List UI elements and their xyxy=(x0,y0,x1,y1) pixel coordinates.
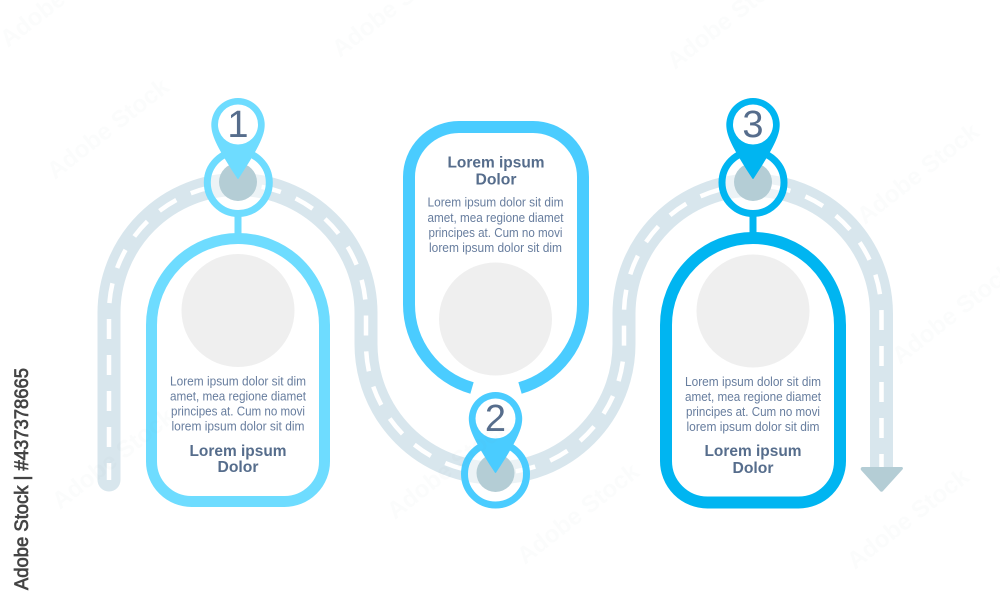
panel 1 body text: principes at. Cum no movi xyxy=(171,404,305,418)
panel 2 body text: amet, mea regione diamet xyxy=(428,210,564,225)
panel 1 heading xyxy=(190,443,286,476)
watermark: Adobe Stock xyxy=(512,458,645,570)
panel 2 xyxy=(409,127,583,388)
panel 2 body text: Lorem ipsum dolor sit dim xyxy=(428,195,564,210)
panel 3 body text: Lorem ipsum dolor sit dim xyxy=(685,374,821,389)
panel 3 heading xyxy=(704,443,802,477)
panel 3 body text xyxy=(685,374,821,434)
number 1: 1 xyxy=(227,104,249,146)
panel 3 body text: lorem ipsum dolor sit dim xyxy=(686,419,820,434)
watermark: Adobe Stock xyxy=(842,463,975,575)
panel 2 body text: principes at. Cum no movi xyxy=(428,225,563,240)
marker 1 xyxy=(207,98,269,235)
panel 2 body text: lorem ipsum dolor sit dim xyxy=(429,240,562,255)
panel 1 outline xyxy=(152,238,324,501)
panel 3 xyxy=(666,238,840,502)
number 3: 3 xyxy=(742,104,764,146)
panel 3 outline xyxy=(666,238,840,502)
panel 3 heading: Dolor xyxy=(732,460,774,477)
watermark: Adobe Stock xyxy=(42,73,175,185)
panel 2 body text xyxy=(428,195,564,255)
panel 2 image placeholder xyxy=(439,262,552,376)
marker 3 xyxy=(722,98,784,235)
panel 3 image placeholder xyxy=(696,254,810,368)
watermark: Adobe Stock xyxy=(382,413,515,525)
road with arrow xyxy=(109,184,903,492)
panel 3 body text: principes at. Cum no movi xyxy=(686,404,820,419)
panel 2 heading xyxy=(448,154,544,188)
panel 1 body text: lorem ipsum dolor sit dim xyxy=(172,418,304,434)
panel 3 heading: Lorem ipsum xyxy=(704,443,802,460)
panel 2 heading: Lorem ipsum xyxy=(448,154,544,172)
panel 1 heading: Dolor xyxy=(218,459,258,476)
panel 1 body text xyxy=(170,374,306,434)
panel 1 xyxy=(152,238,324,501)
panel 1 image placeholder xyxy=(182,254,294,367)
panel 1 body text: Lorem ipsum dolor sit dim xyxy=(170,374,306,388)
marker 2 xyxy=(464,392,526,505)
panel 2 heading: Dolor xyxy=(476,172,516,188)
panel 2 outline xyxy=(409,127,583,388)
watermark: Adobe Stock xyxy=(47,403,180,515)
panel 1 body text: amet, mea regione diamet xyxy=(170,388,306,404)
watermark: Adobe Stock xyxy=(852,118,985,230)
panel 3 body text: amet, mea regione diamet xyxy=(685,389,821,404)
stock id label: Adobe Stock | #437378665 xyxy=(12,368,33,590)
panel 1 heading: Lorem ipsum xyxy=(190,443,286,460)
number 2: 2 xyxy=(485,398,506,440)
